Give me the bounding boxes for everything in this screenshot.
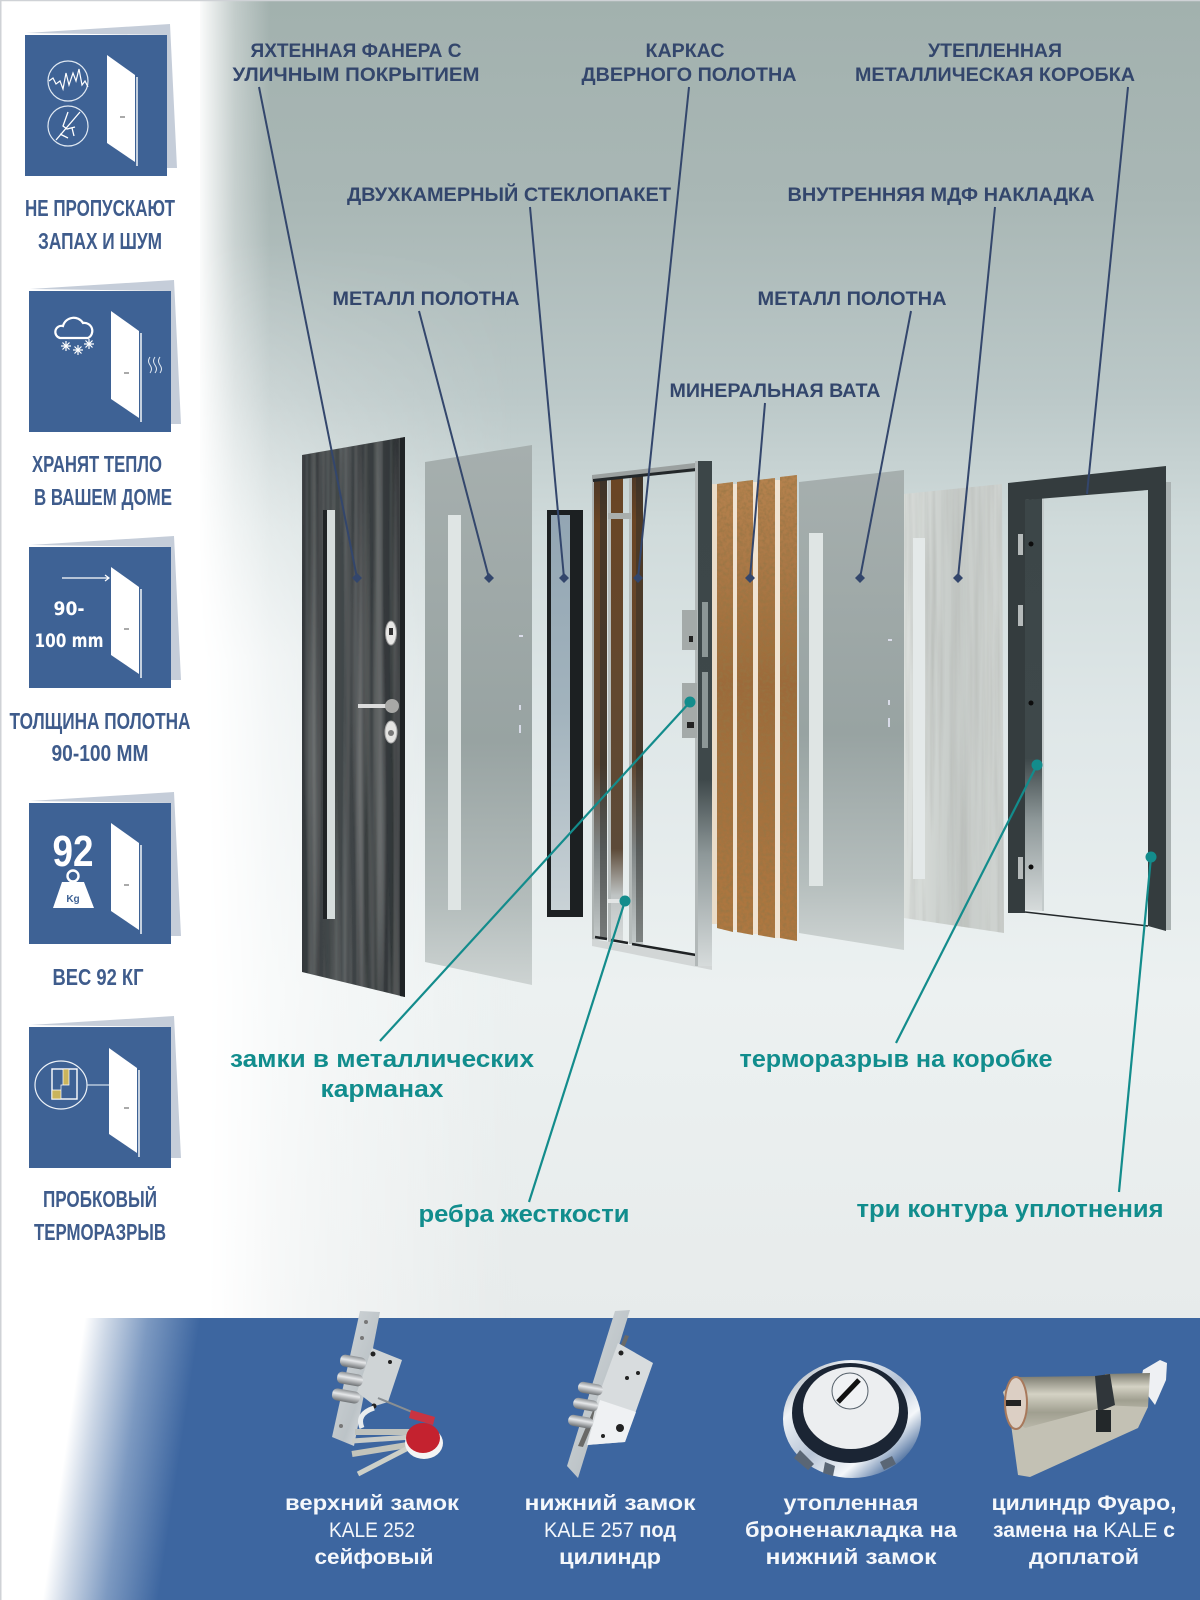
caption: lower lock [524,1492,696,1569]
caption: cylinder: цилиндр Фуаро, [992,1492,1176,1515]
insulated metal door box [1008,466,1171,931]
door leaf: exterior plywood [302,437,405,997]
leader: metal inner [855,311,911,583]
caption: upper lock: сейфовый [314,1546,434,1569]
label: thermal break: терморазрыв на коробке [740,1046,1052,1073]
bottom band [0,1318,1200,1600]
caption: cork thermal break: ТЕРМОРАЗРЫВ [34,1219,166,1245]
caption: heat [32,451,172,510]
caption: thickness: ТОЛЩИНА ПОЛОТНА [10,708,190,734]
caption: upper lock [285,1492,460,1569]
caption: upper lock: KALE 252 [329,1519,415,1542]
caption: escutcheon: нижний замок [766,1546,937,1569]
leader: thermal break [896,760,1042,1043]
caption: smell and noise [25,195,175,254]
caption: cylinder [992,1492,1176,1569]
photo: armored escutcheon [783,1360,921,1478]
caption: escutcheon: броненакладка на [745,1519,957,1542]
inner MDF panel [904,484,1004,933]
metal sheet outer [425,445,532,985]
icon card: thickness: 90- [54,598,84,620]
caption: cork thermal break [34,1185,166,1245]
leader: ribs [529,896,630,1202]
door frame carcass [592,461,712,970]
leader lines: teal [380,696,1156,1202]
mineral wool strips [712,475,797,941]
label: box [855,41,1135,86]
label: seals: три контура уплотнения [856,1196,1164,1223]
caption: cork thermal break: ПРОБКОВЫЙ [43,1185,157,1212]
caption: lower lock: KALE 257 под [544,1519,676,1542]
background [202,1,1200,1318]
label: glass unit: ДВУХКАМЕРНЫЙ СТЕКЛОПАКЕТ [347,184,671,206]
icon card: heat [29,280,181,432]
label: mineral wool: МИНЕРАЛЬНАЯ ВАТА [670,381,881,402]
icon card: cork thermal break [29,1016,181,1168]
label: metal outer: МЕТАЛЛ ПОЛОТНА [332,289,520,310]
label: frame: КАРКАС [646,41,725,62]
leader: seals [1119,852,1156,1192]
icon card: smell and noise [25,24,177,176]
photo: lower lock [567,1310,653,1478]
caption: cylinder: замена на KALE с [993,1519,1175,1542]
exploded door [302,437,1171,997]
panel: left feature icons [10,24,190,1245]
caption: smell and noise: ЗАПАХ И ШУМ [38,228,162,254]
label: locks [230,1046,535,1103]
icon card: weight [29,792,181,944]
leader: metal outer [419,311,494,583]
icon card: weight: Kg [66,894,80,905]
hardware captions [285,1492,1176,1569]
leader: locks [380,696,696,1041]
label: box: МЕТАЛЛИЧЕСКАЯ КОРОБКА [855,65,1135,86]
icon card: thickness [29,536,181,688]
label: plywood [232,41,480,86]
caption: cylinder: доплатой [1029,1546,1139,1569]
leader: mineral wool [745,403,765,583]
leader: box [1087,87,1128,494]
caption: escutcheon: утопленная [784,1492,918,1515]
glass unit [547,510,583,917]
label: locks: карманах [320,1076,444,1103]
label: frame [582,41,797,86]
icon card: weight: 92 [52,827,94,876]
caption: escutcheon [745,1492,957,1569]
caption: upper lock: верхний замок [285,1492,460,1515]
leader: glass unit [530,207,569,583]
caption: smell and noise: НЕ ПРОПУСКАЮТ [25,195,175,221]
leader: MDF [953,207,995,583]
label: locks: замки в металлических [230,1046,535,1073]
caption: weight: ВЕС 92 КГ [52,964,144,990]
label: metal inner: МЕТАЛЛ ПОЛОТНА [758,289,947,310]
icon card: thickness: 100 mm [34,630,104,652]
photo: upper lock with keys [331,1311,443,1474]
caption: lower lock: цилиндр [559,1546,661,1569]
caption: heat: ХРАНЯТ ТЕПЛО [32,451,162,477]
photo: euro cylinder [1003,1360,1167,1477]
label: box: УТЕПЛЕННАЯ [928,41,1062,62]
label: ribs: ребра жесткости [418,1201,630,1228]
label: frame: ДВЕРНОГО ПОЛОТНА [582,65,797,86]
hardware photos [331,1310,1167,1478]
caption: heat: В ВАШЕМ ДОМЕ [34,484,172,510]
caption: lower lock: нижний замок [524,1492,696,1515]
leader: plywood [259,87,362,583]
caption: thickness: 90-100 ММ [52,740,148,766]
leader lines: dark blue [259,87,1128,583]
label: plywood: ЯХТЕННАЯ ФАНЕРА С [250,41,462,62]
caption: thickness [10,708,190,766]
leader: frame [633,87,689,583]
metal sheet inner [799,470,904,950]
label: plywood: УЛИЧНЫМ ПОКРЫТИЕМ [232,65,480,86]
label: MDF: ВНУТРЕННЯЯ МДФ НАКЛАДКА [788,185,1095,206]
part labels [230,41,1164,1228]
